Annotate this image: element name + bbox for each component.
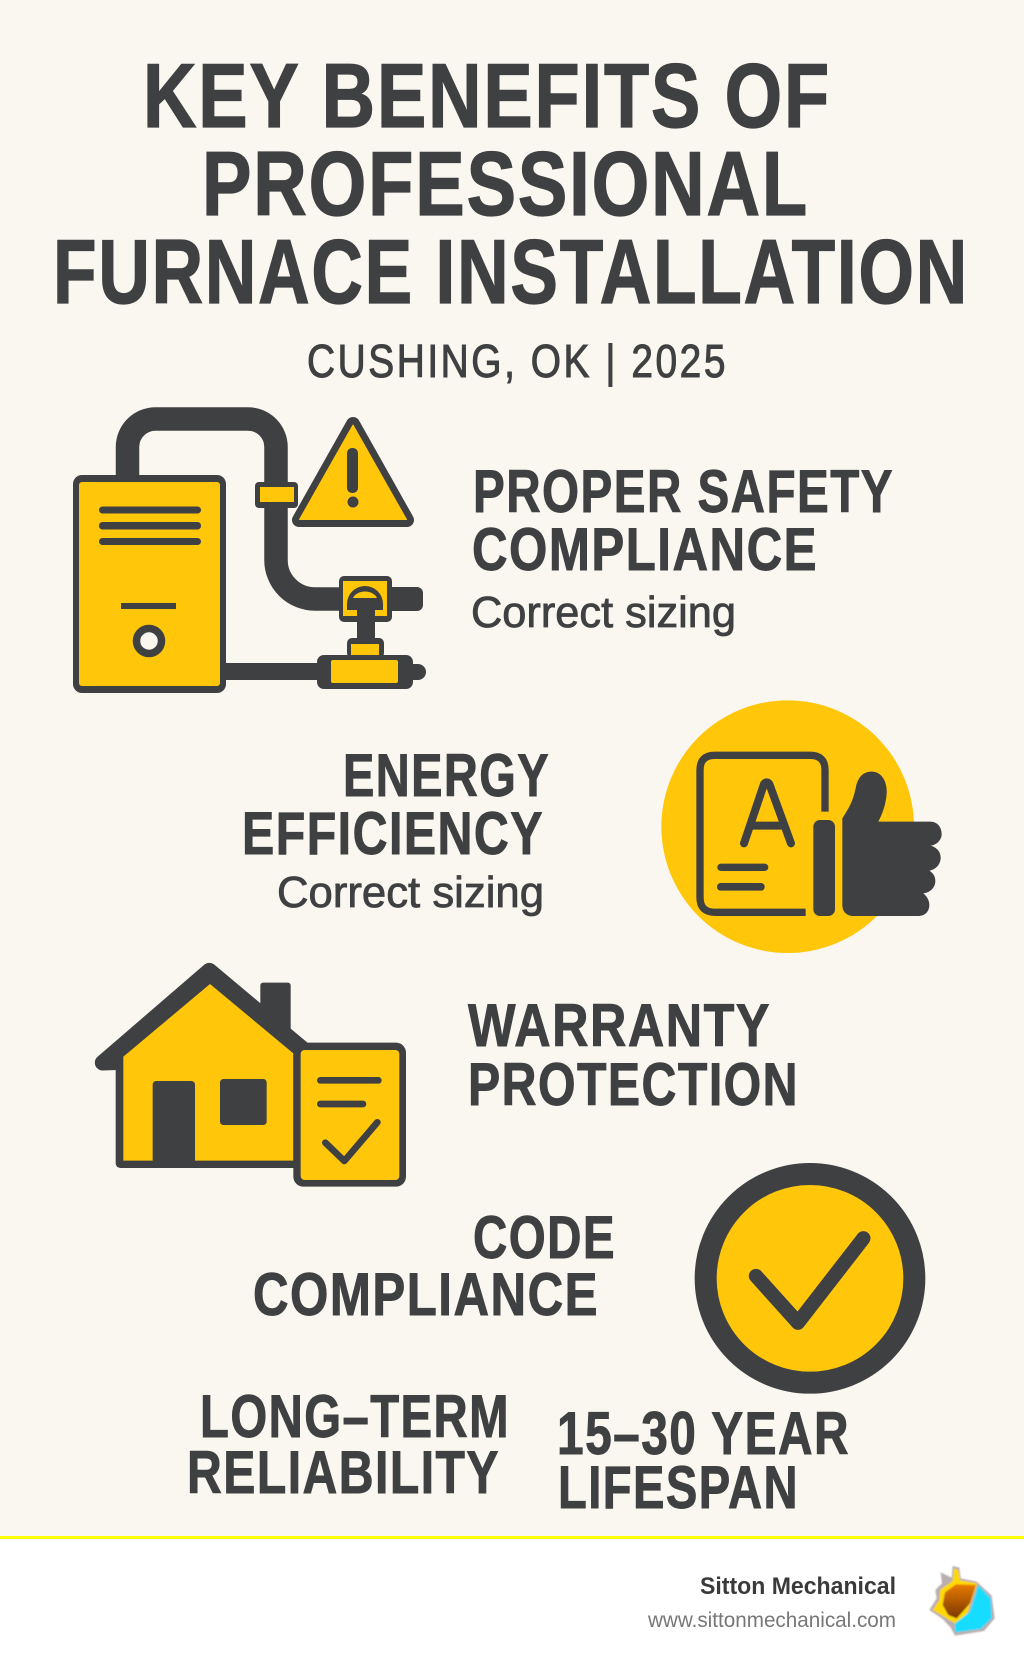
text: correct sizing: Correct sizing	[277, 868, 544, 917]
text: 15-30 year lifespan	[557, 1400, 850, 1521]
text: 15-30 year lifespan: 15–30 YEAR	[557, 1400, 850, 1467]
panel: long-term reliability	[187, 1383, 850, 1521]
heading: proper safety compliance	[472, 458, 894, 583]
icon: furnace with pipes and warning sign	[73, 419, 426, 693]
heading: long-term reliability: LONG–TERM	[200, 1383, 510, 1450]
heading: warranty protection: WARRANTY	[468, 992, 771, 1059]
heading: energy efficiency: ENERGY	[343, 742, 550, 809]
subtitle: CUSHING, OK | 2025	[307, 335, 728, 387]
heading: proper safety compliance: COMPLIANCE	[472, 516, 818, 583]
heading: proper safety compliance: PROPER SAFETY	[473, 458, 894, 525]
heading: code compliance: CODE	[473, 1204, 616, 1271]
text: website: www.sittonmechanical.com	[647, 1609, 896, 1632]
footer	[0, 1536, 1024, 1666]
icon: energy rating document with thumbs up	[661, 700, 942, 953]
panel: proper safety compliance	[73, 419, 894, 693]
icon: house with checklist document	[103, 971, 406, 1187]
heading: warranty protection	[468, 992, 799, 1118]
panel: code compliance	[253, 1174, 914, 1383]
panel: energy efficiency	[242, 700, 942, 953]
text: company name: Sitton Mechanical	[700, 1573, 896, 1600]
heading: energy efficiency: EFFICIENCY	[242, 800, 544, 867]
heading: warranty protection: PROTECTION	[468, 1051, 799, 1118]
heading: long-term reliability	[187, 1383, 510, 1506]
panel: warranty protection	[103, 971, 799, 1187]
title	[53, 46, 969, 323]
heading: code compliance	[253, 1204, 616, 1328]
heading: energy efficiency	[242, 742, 550, 867]
icon: check mark in circle	[706, 1174, 914, 1383]
icon: company logo	[929, 1566, 995, 1636]
heading: code compliance: COMPLIANCE	[253, 1261, 599, 1328]
title: KEY BENEFITS OF	[143, 46, 831, 147]
text: correct sizing: Correct sizing	[471, 588, 736, 637]
heading: long-term reliability: RELIABILITY	[187, 1439, 500, 1506]
title: PROFESSIONAL	[202, 134, 809, 235]
text: 15-30 year lifespan: LIFESPAN	[558, 1454, 799, 1521]
